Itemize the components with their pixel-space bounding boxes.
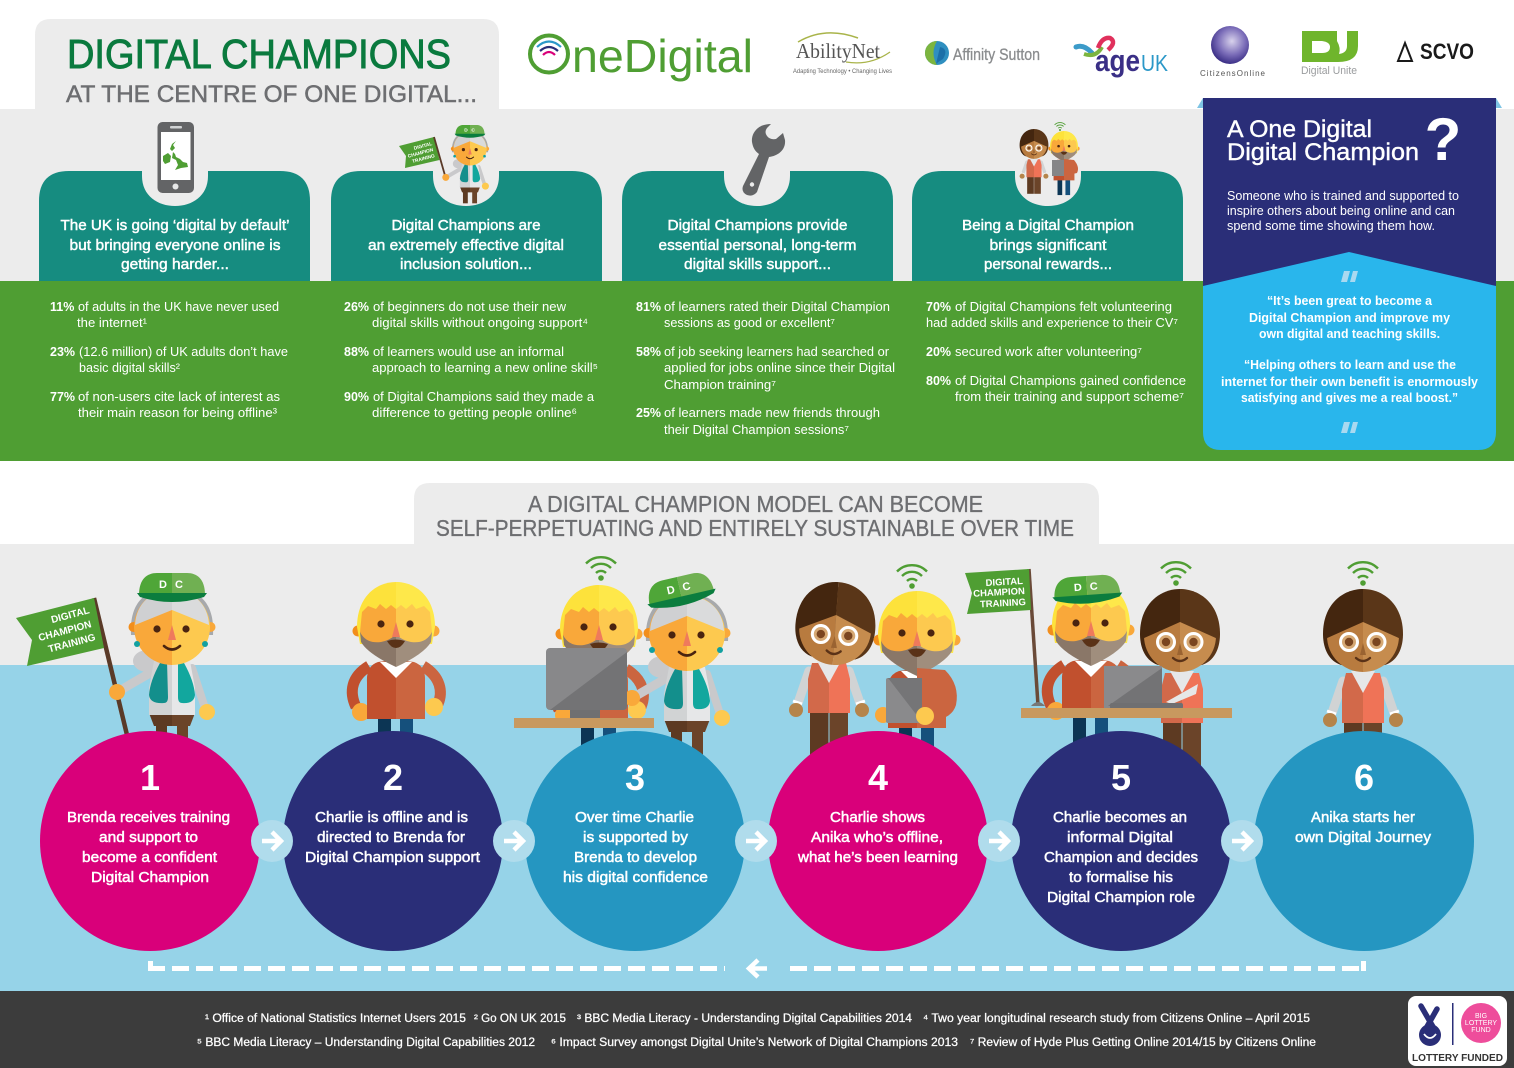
step 1 circle: become a confident [82, 849, 218, 866]
card 3 heading: Digital Champions provide [668, 217, 848, 234]
step 5 circle: informal Digital [1067, 829, 1173, 846]
logo: Digital Unite: Digital Unite [1301, 65, 1357, 77]
model heading [436, 491, 1074, 541]
title: AT THE CENTRE OF ONE DIGITAL... [66, 81, 477, 108]
step 5 circle: to formalise his [1069, 869, 1173, 886]
icon: Brenda with training flag: CHAMPION [407, 147, 435, 160]
logo: Lottery Funded: LOTTERY FUNDED [1412, 1053, 1503, 1064]
logo: Affinity Sutton [925, 41, 1040, 65]
step 1 circle: and support to [99, 829, 198, 846]
step 4 circle: Anika who’s offline, [811, 829, 943, 846]
footnotes: ² Go ON UK 2015 [474, 1013, 566, 1025]
card 3 heading: essential personal, long-term [658, 237, 856, 254]
stats column 4 [926, 299, 1186, 404]
icon: Brenda with training flag [399, 125, 489, 203]
stats column 1: 77% [50, 390, 75, 404]
stats column 1: their main reason for being offline³ [78, 405, 278, 420]
step 1 circle: Digital Champion [91, 869, 209, 886]
step 3 circle: is supported by [583, 829, 689, 846]
step 5 circle: Charlie becomes an [1053, 809, 1187, 826]
stats column 1: of adults in the UK have never used [78, 299, 279, 314]
footnotes: ⁵ BBC Media Literacy – Understanding Digital Capabilities 2012 [197, 1037, 535, 1049]
top grey band [0, 109, 1514, 281]
step 1 circle: 1 [140, 757, 160, 798]
arrow 3 to 4 [735, 820, 777, 862]
stats column 2: digital skills without ongoing support⁴ [372, 315, 588, 330]
quotes: satisfying and gives me a real boost.” [1241, 391, 1458, 405]
panel: definition of a digital champion [1197, 98, 1502, 450]
step 5 circle: Digital Champion role [1047, 889, 1195, 906]
title tab background [35, 19, 499, 110]
stats column 1: basic digital skills² [79, 360, 181, 375]
panel: card 2 effective solution [331, 125, 602, 281]
logo: Lottery Funded: FUND [1471, 1027, 1491, 1034]
arrow 2 to 3 [493, 820, 535, 862]
footnotes: ⁶ Impact Survey amongst Digital Unite’s Network of Digital Champions 2013 [551, 1037, 958, 1049]
card 3 heading [658, 217, 856, 273]
stats column 2: of Digital Champions said they made a [373, 389, 595, 404]
stats column 3: 58% [636, 345, 661, 359]
step 2 circle: directed to Brenda for [317, 829, 465, 846]
logo: Citizens Online: CitizensOnline [1200, 69, 1266, 78]
card 2 heading [368, 217, 564, 273]
stats column 4: had added skills and experience to their CV⁷ [926, 315, 1178, 330]
quotes: Digital Champion and improve my [1249, 311, 1450, 325]
logo: Lottery Funded: LOTTERY [1465, 1020, 1497, 1027]
quotes: “Helping others to learn and use the [1244, 358, 1456, 372]
icon: Brenda with training flag: TRAINING [412, 153, 436, 165]
icon: wrench [742, 124, 785, 196]
logo: AbilityNet [793, 33, 892, 75]
footnotes: ⁴ Two year longitudinal research study from Citizens Online – April 2015 [923, 1013, 1310, 1025]
step 5 circle [1011, 731, 1231, 951]
definition heading: A One Digital [1227, 116, 1372, 143]
card 4 heading: Being a Digital Champion [962, 217, 1134, 234]
card 1 heading: getting harder... [121, 256, 229, 273]
logo: Age UK [1076, 38, 1169, 78]
title [66, 31, 477, 108]
stats column 2: 88% [344, 345, 369, 359]
quotes: internet for their own benefit is enormously [1221, 375, 1478, 389]
icon: smartphone with UK map [158, 122, 194, 193]
quotes: “It’s been great to become a [1267, 294, 1433, 308]
stats column 2: 90% [344, 390, 369, 404]
icon: quote marks bottom [1341, 422, 1358, 433]
model grey band [0, 544, 1514, 665]
stats column 3: 81% [636, 300, 661, 314]
card 1 heading [60, 217, 290, 273]
scene 2: Charlie [352, 582, 443, 760]
stats column 4: 20% [926, 345, 951, 359]
scene 3: Charlie and Brenda at computer [514, 557, 730, 763]
stats column 3: of learners made new friends through [664, 405, 880, 420]
card 2 heading: Digital Champions are [392, 217, 540, 234]
step 6 circle: 6 [1354, 757, 1374, 798]
step 2 circle [283, 731, 503, 951]
stats column 2: difference to getting people online⁶ [372, 405, 577, 420]
model heading: SELF-PERPETUATING AND ENTIRELY SUSTAINABLE OVER TIME [436, 515, 1074, 541]
stats column 1 [50, 299, 288, 420]
logo: AbilityNet: Adapting Technology • Changing Lives [793, 69, 892, 75]
logo: SCVO: SCVO [1420, 39, 1474, 64]
step 5 circle: 5 [1111, 757, 1131, 798]
step 6 circle: Anika starts her [1311, 809, 1415, 826]
step 2 circle: 2 [383, 757, 403, 798]
scene 5: Charlie and Anika at laptop with flag: DIGITAL [985, 576, 1023, 589]
stats column 2: of learners would use an informal [373, 344, 564, 359]
stats column 3: of learners rated their Digital Champion [664, 299, 890, 314]
footnotes: ³ BBC Media Literacy - Understanding Digital Capabilities 2014 [577, 1013, 913, 1025]
step 2 circle: Digital Champion support [305, 849, 481, 866]
card 2 heading: inclusion solution... [400, 256, 532, 273]
stats column 2 [344, 299, 598, 420]
card 4 heading: personal rewards... [984, 256, 1112, 273]
step 6 circle: own Digital Journey [1295, 829, 1432, 846]
logo: Digital Unite [1301, 31, 1358, 77]
step 1 circle: Brenda receives training [67, 809, 230, 826]
footer bar [0, 991, 1514, 1068]
icon: Brenda with training flag: DIGITAL [413, 141, 433, 152]
stats column 2: approach to learning a new online skill⁵ [372, 360, 598, 375]
footnotes [197, 1013, 1316, 1049]
icon: question mark: ? [1425, 106, 1461, 173]
logo: SCVO [1398, 39, 1474, 64]
step 6 circle [1254, 731, 1474, 951]
logo: AbilityNet: AbilityNet [796, 39, 880, 63]
panel: card 1 digital by default [39, 122, 310, 281]
quotes [1221, 294, 1478, 405]
green statistics band [0, 281, 1514, 461]
stats column 3: applied for jobs online since their Digital [664, 360, 895, 375]
logo: Age UK: UK [1141, 50, 1169, 76]
step 2 circle: Charlie is offline and is [315, 809, 468, 826]
card 4 heading: brings significant [990, 237, 1107, 254]
icon: Anika and Charlie [1020, 123, 1080, 195]
dashed return loop arrow [148, 960, 1366, 977]
scene 6: Anika [1323, 562, 1403, 769]
icon: quote marks top [1341, 271, 1358, 282]
scene 1: Brenda with flag: DIGITAL [50, 605, 91, 626]
step 3 circle [525, 731, 745, 951]
definition heading [1227, 116, 1419, 166]
model light blue band [0, 665, 1514, 991]
model heading: A DIGITAL CHAMPION MODEL CAN BECOME [528, 491, 983, 517]
stats column 1: (12.6 million) of UK adults don’t have [79, 344, 288, 359]
scene 5: Charlie and Anika at laptop with flag [965, 562, 1232, 769]
arrow 4 to 5 [978, 820, 1020, 862]
panel: card 4 personal rewards [912, 123, 1183, 281]
definition heading: Digital Champion [1227, 139, 1419, 166]
definition text: Someone who is trained and supported to [1227, 188, 1459, 203]
card 4 heading [962, 217, 1134, 273]
logo: Citizens Online [1200, 26, 1266, 78]
definition text: inspire others about being online and can [1227, 203, 1455, 218]
stats column 1: 23% [50, 345, 75, 359]
step 3 circle: his digital confidence [563, 869, 708, 886]
stats column 1: 11% [50, 300, 74, 314]
step 4 circle: 4 [868, 757, 888, 798]
stats column 3: 25% [636, 406, 661, 420]
stats column 3: sessions as good or excellent⁷ [664, 315, 835, 330]
logo: Age UK: age [1095, 43, 1140, 78]
stats column 3: their Digital Champion sessions⁷ [664, 422, 849, 437]
card 1 heading: The UK is going ‘digital by default’ [60, 217, 290, 234]
definition text: spend some time showing them how. [1227, 218, 1435, 233]
stats column 4: 80% [926, 374, 951, 388]
arrow 1 to 2 [251, 820, 293, 862]
logo: Lottery Funded: BIG [1475, 1013, 1487, 1020]
stats column 4: from their training and support scheme⁷ [955, 389, 1184, 404]
step 3 circle: Over time Charlie [575, 809, 694, 826]
scene 5: Charlie and Anika at laptop with flag: CHAMPION [973, 586, 1025, 600]
model heading tab [414, 483, 1099, 545]
stats column 3 [636, 299, 895, 437]
step 5 circle: Champion and decides [1044, 849, 1198, 866]
stats column 2: 26% [344, 300, 369, 314]
footnotes: ¹ Office of National Statistics Internet Users 2015 [205, 1013, 466, 1025]
footnotes: ⁷ Review of Hyde Plus Getting Online 2014/15 by Citizens Online [970, 1037, 1316, 1049]
stats column 4: of Digital Champions felt volunteering [955, 299, 1172, 314]
logo: Lottery Funded [1408, 996, 1507, 1066]
card 2 heading: an extremely effective digital [368, 237, 564, 254]
logo: Affinity Sutton: Affinity Sutton [953, 45, 1040, 64]
quotes: own digital and teaching skills. [1259, 327, 1440, 341]
card 3 heading: digital skills support... [684, 256, 831, 273]
stats column 4: 70% [926, 300, 951, 314]
panel: card 3 skills support [622, 124, 893, 281]
step 3 circle: Brenda to develop [574, 849, 697, 866]
step 3 circle: 3 [625, 757, 645, 798]
scene 1: Brenda with flag: TRAINING [47, 632, 97, 655]
logo: OneDigital: neDigital [572, 30, 753, 82]
stats column 4: of Digital Champions gained confidence [955, 373, 1186, 388]
stats column 4: secured work after volunteering⁷ [955, 344, 1142, 359]
stats column 3: of job seeking learners had searched or [664, 344, 890, 359]
scene 1: Brenda with flag [16, 573, 216, 751]
scene 1: Brenda with flag: CHAMPION [37, 619, 93, 644]
scene 5: Charlie and Anika at laptop with flag: TRAINING [980, 597, 1026, 610]
stats column 2: of beginners do not use their new [373, 299, 567, 314]
stats column 3: Champion training⁷ [664, 377, 776, 392]
title: DIGITAL CHAMPIONS [67, 31, 451, 77]
step 4 circle [768, 731, 988, 951]
step 4 circle: what he’s been learning [797, 849, 958, 866]
definition text [1227, 188, 1459, 233]
step 4 circle: Charlie shows [830, 809, 925, 826]
card 1 heading: but bringing everyone online is [70, 237, 280, 254]
stats column 1: of non-users cite lack of interest as [78, 389, 280, 404]
scene 4: Anika and Charlie with tablet [789, 565, 960, 769]
stats column 1: the internet¹ [77, 315, 148, 330]
arrow 5 to 6 [1221, 820, 1263, 862]
step 1 circle [40, 731, 260, 951]
